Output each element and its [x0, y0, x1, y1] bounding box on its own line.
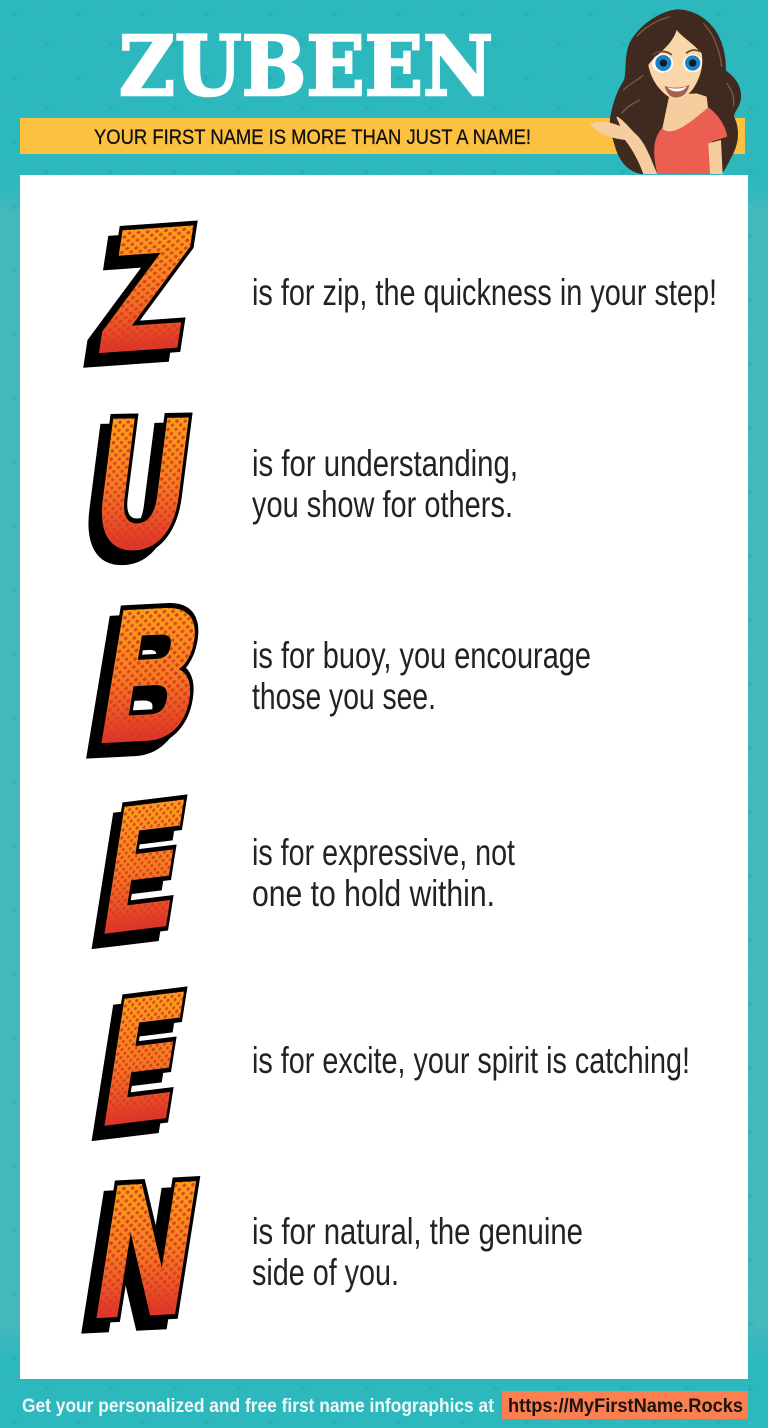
- text: N lines: side of you.: [252, 1252, 399, 1293]
- letter E: E: [94, 765, 194, 968]
- text: N lines: is for natural, the genuine: [252, 1211, 583, 1252]
- letter B: B: [78, 579, 203, 790]
- footer link button: https://MyFirstName.Rocks: [508, 1396, 743, 1417]
- text: B lines: those you see.: [252, 676, 436, 717]
- letter N: N: [85, 1145, 208, 1354]
- text: E lines: one to hold within.: [252, 873, 495, 914]
- panel: white content: [20, 175, 748, 1379]
- letter N: N: [85, 1145, 208, 1354]
- title: ZUBEEN: [119, 19, 493, 115]
- letter U: U: [77, 392, 188, 595]
- text: U lines: [252, 443, 518, 525]
- letter E second: E: [94, 957, 194, 1160]
- letter Z: Z: [92, 192, 202, 386]
- letter B: B: [89, 569, 214, 779]
- text: U lines: you show for others.: [252, 484, 513, 525]
- letter B: B: [89, 569, 214, 779]
- letter Z: Z: [92, 192, 202, 386]
- text: B lines: [252, 635, 591, 717]
- letter E second: E: [94, 957, 194, 1160]
- letter Z: Z: [92, 192, 202, 386]
- text: E lines: [252, 832, 516, 914]
- letter Z: Z: [81, 202, 191, 396]
- letter U: U: [87, 382, 198, 585]
- letter E: E: [94, 765, 194, 968]
- letter E second: E: [94, 957, 194, 1160]
- subtitle banner: YOUR FIRST NAME IS MORE THAN JUST A NAME!: [94, 126, 531, 149]
- letter U: U: [87, 382, 198, 585]
- footer: [22, 1391, 748, 1419]
- footer text: Get your personalized and free first name infographics at: [22, 1396, 495, 1417]
- text: E lines: is for expressive, not: [252, 832, 516, 873]
- text: U lines: is for understanding,: [252, 443, 518, 484]
- letter U: U: [87, 382, 198, 585]
- text: B lines: is for buoy, you encourage: [252, 635, 591, 676]
- text: N lines: [252, 1211, 583, 1293]
- letter B: B: [89, 569, 214, 779]
- letter E second: E: [85, 967, 184, 1171]
- icon: cartoon woman: [590, 9, 741, 174]
- letter N: N: [85, 1145, 208, 1354]
- letter N: N: [74, 1155, 197, 1365]
- letter E: E: [94, 765, 194, 968]
- letter E: E: [85, 775, 184, 979]
- subtitle banner: [20, 118, 745, 154]
